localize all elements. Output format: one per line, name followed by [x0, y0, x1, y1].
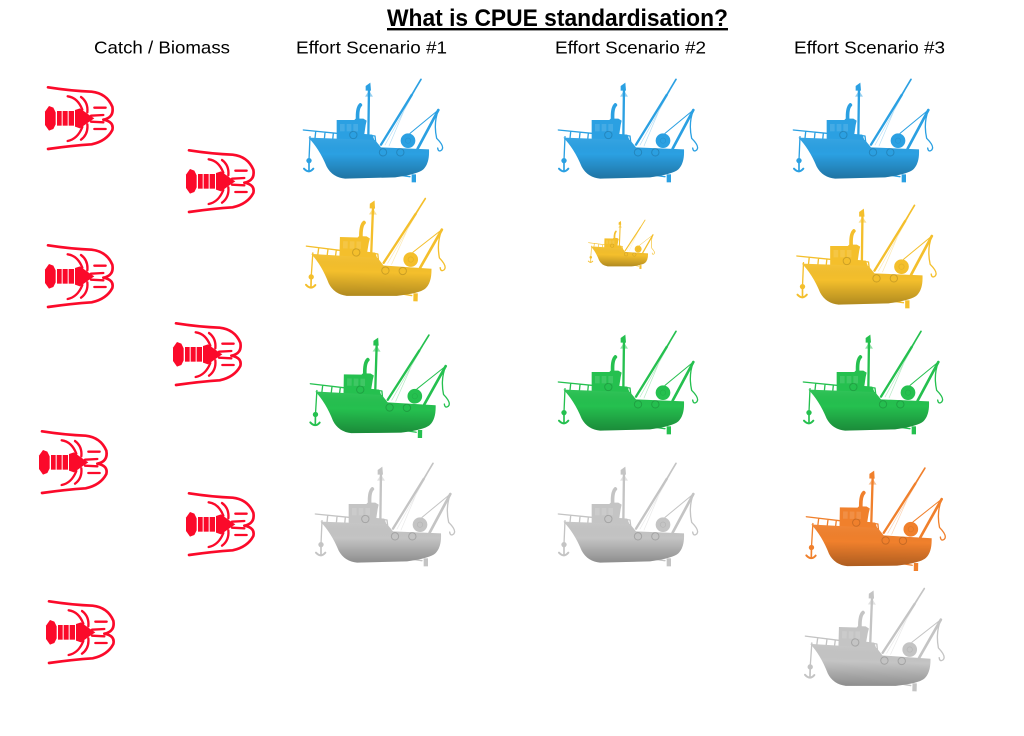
column heading: effort scenario 2: Effort Scenario #2 [555, 38, 706, 58]
icon: small yellow boat [588, 219, 655, 269]
icon: grey boat [558, 463, 698, 566]
icon: orange boat [805, 466, 946, 572]
icon: lobster 4 [173, 323, 241, 385]
icon: green boat [558, 331, 698, 434]
icon: green boat [309, 333, 450, 439]
column heading: catch / biomass: Catch / Biomass [94, 38, 230, 58]
icon: grey boat [804, 585, 946, 692]
effort scenario 3 boats [793, 79, 946, 692]
icon: lobster 3 [45, 245, 113, 307]
icon: lobster 1 [45, 87, 113, 149]
icon: blue boat [303, 79, 443, 182]
icon: blue boat [793, 79, 933, 182]
icon: lobster 2 [186, 150, 254, 212]
icon: grey boat [315, 463, 455, 566]
icon: yellow boat [305, 195, 447, 302]
icon: blue boat [558, 79, 698, 182]
icon: lobster 7 [46, 601, 114, 663]
icon: lobster 5 [39, 431, 107, 493]
column heading: effort scenario 3: Effort Scenario #3 [794, 38, 945, 58]
column heading: effort scenario 1: Effort Scenario #1 [296, 38, 447, 58]
catch / biomass lobster icons [39, 87, 254, 663]
icon: green boat [803, 331, 943, 434]
effort scenario 1 boats [303, 79, 455, 566]
icon: lobster 6 [186, 493, 254, 555]
effort scenario 2 boats [558, 79, 698, 566]
icon: yellow boat [797, 205, 936, 308]
title: What is CPUE standardisation? [387, 5, 728, 32]
